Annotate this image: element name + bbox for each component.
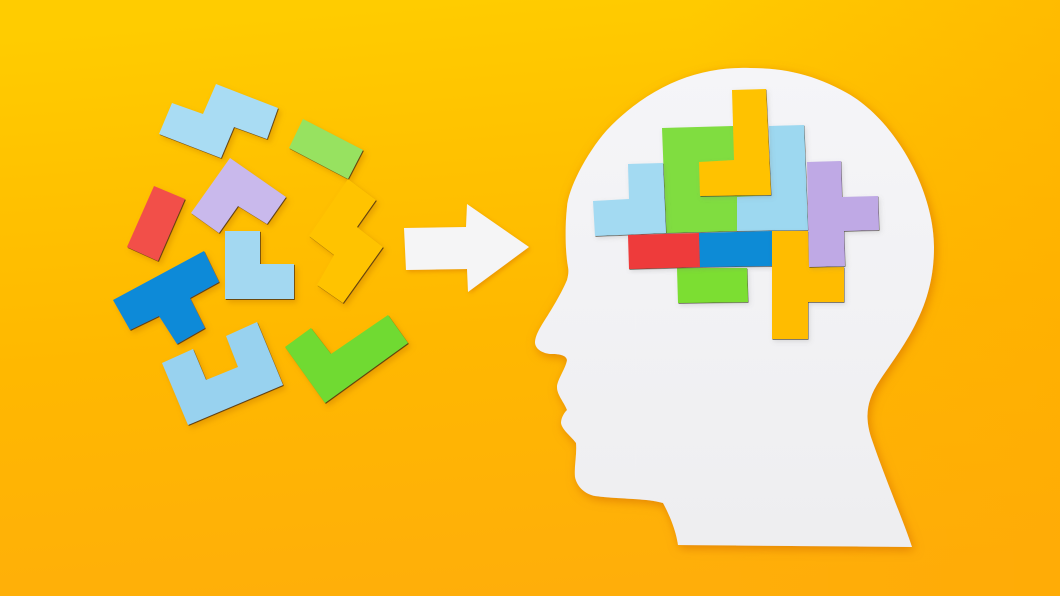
- brain piece: purple cross: [807, 161, 879, 267]
- brain piece: red bar: [628, 233, 700, 269]
- brain piece: green large block: [662, 126, 771, 233]
- piece: light green bar: [289, 119, 363, 179]
- piece: light blue L: [225, 231, 294, 299]
- piece: purple corner: [191, 158, 286, 233]
- scattered puzzle pieces: [113, 84, 408, 425]
- brain piece: green bottom bar: [677, 268, 748, 303]
- piece: light blue S block: [159, 84, 278, 158]
- arrow pointing to head: [404, 204, 529, 292]
- piece: blue T: [113, 251, 219, 344]
- brain piece: blue bar: [699, 231, 772, 267]
- piece: light blue U: [162, 322, 283, 425]
- piece: red bar: [127, 186, 185, 261]
- brain piece: yellow lower T: [772, 231, 844, 339]
- brain made of puzzle pieces: [593, 89, 879, 339]
- brain piece: light blue right L: [737, 125, 808, 231]
- brain piece: light blue left L: [593, 163, 666, 236]
- piece: yellow zigzag: [309, 179, 383, 303]
- head silhouette: [535, 68, 934, 547]
- brain piece: yellow top L: [699, 89, 771, 196]
- piece: green L: [285, 315, 408, 403]
